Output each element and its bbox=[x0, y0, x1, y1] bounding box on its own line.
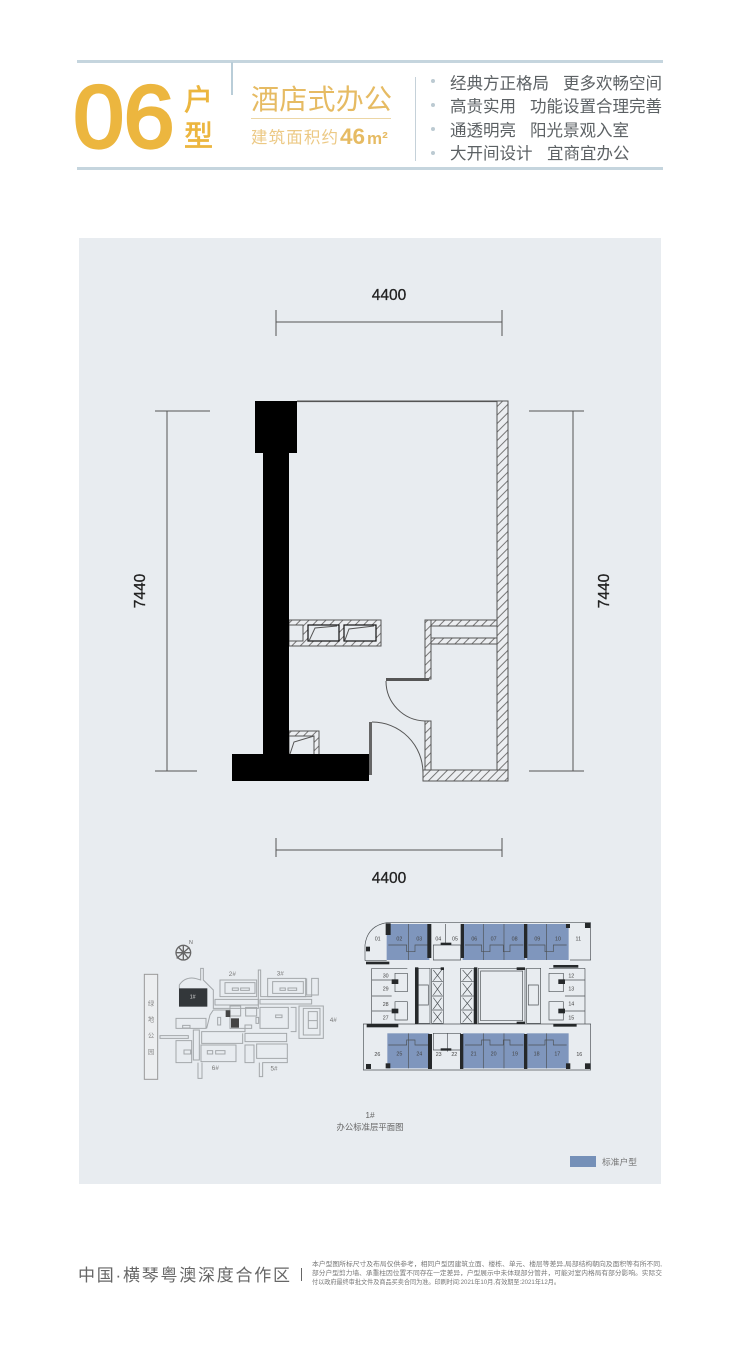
unit label: 户 bbox=[184, 84, 213, 117]
room numbers: 11 bbox=[576, 936, 581, 942]
room numbers: 27 bbox=[383, 1016, 389, 1022]
green park bbox=[144, 974, 158, 1079]
green park: 地 bbox=[148, 1014, 155, 1023]
room numbers: 22 bbox=[451, 1052, 457, 1058]
height left: 7440 bbox=[132, 573, 149, 608]
room numbers: 15 bbox=[568, 1016, 574, 1022]
room outlines bbox=[363, 923, 591, 1070]
location: 中国·横琴粤澳深度合作区 bbox=[78, 1266, 290, 1285]
room numbers: 14 bbox=[568, 1001, 574, 1007]
floor area: 46 bbox=[340, 124, 365, 149]
key plan caption bbox=[336, 1110, 404, 1132]
key plan caption: 办公标准层平面图 bbox=[336, 1122, 404, 1132]
room numbers: 16 bbox=[576, 1052, 582, 1058]
room numbers: 06 bbox=[471, 936, 477, 942]
room numbers: 20 bbox=[491, 1052, 497, 1058]
room numbers: 05 bbox=[452, 936, 458, 942]
black structural walls bbox=[232, 401, 369, 781]
feature list: 宜商宜办公 bbox=[547, 144, 630, 163]
feature list: 功能设置合理完善 bbox=[530, 97, 662, 116]
disclaimer: 部分户型剪力墙、承重柱因位置不同存在一定差异，户型展示中未体现部分管井，可能对室内格局有部分影响。实际交 bbox=[312, 1268, 663, 1277]
room numbers: 01 bbox=[375, 936, 381, 942]
room numbers: 10 bbox=[555, 936, 561, 942]
green park: 公 bbox=[148, 1032, 155, 1039]
shafts bbox=[289, 620, 381, 755]
header bbox=[74, 60, 663, 170]
building 1 bbox=[179, 988, 207, 1007]
room numbers: 18 bbox=[534, 1052, 540, 1058]
width top: 4400 bbox=[372, 287, 407, 304]
unit number: 06 bbox=[74, 67, 174, 166]
room numbers: 24 bbox=[416, 1052, 422, 1058]
hatched bottom wall bbox=[423, 770, 508, 781]
hatched right wall bbox=[497, 401, 508, 781]
room numbers: 19 bbox=[512, 1052, 518, 1058]
room numbers: 17 bbox=[554, 1052, 560, 1058]
feature list: 阳光景观入室 bbox=[530, 121, 629, 140]
green park: 园 bbox=[148, 1048, 154, 1056]
bathroom walls bbox=[425, 620, 497, 770]
disclaimer: 本户型图所标尺寸及布局仅供参考，相同户型因建筑立面、楼栋、单元、楼层等差异,局部结构朝向及面积等有所不同, bbox=[312, 1259, 662, 1268]
room numbers: 29 bbox=[383, 987, 389, 993]
panel: floor plan background bbox=[79, 238, 661, 1184]
compass bbox=[176, 940, 193, 960]
feature list: 大开间设计 bbox=[450, 144, 532, 163]
room numbers: 23 bbox=[436, 1052, 442, 1058]
building labels: 2# bbox=[229, 971, 236, 978]
room numbers: 04 bbox=[435, 936, 441, 942]
building labels bbox=[212, 970, 337, 1073]
feature list bbox=[431, 74, 662, 163]
site plan bbox=[144, 940, 337, 1079]
compass: N bbox=[189, 940, 193, 946]
unit label: 型 bbox=[184, 120, 213, 153]
feature list: 高贵实用 bbox=[450, 97, 516, 116]
unit type title: 酒店式办公 bbox=[251, 84, 392, 115]
room numbers: 12 bbox=[568, 974, 574, 980]
building labels: 6# bbox=[212, 1065, 219, 1072]
stairs bbox=[226, 1010, 239, 1028]
structural columns bbox=[366, 923, 590, 1069]
site roads and buildings bbox=[160, 968, 323, 1078]
room numbers: 08 bbox=[512, 936, 518, 942]
building labels: 5# bbox=[270, 1066, 278, 1073]
unit floor plan bbox=[232, 400, 508, 781]
standard floor key plan bbox=[363, 923, 591, 1070]
height right: 7440 bbox=[596, 573, 613, 608]
room numbers: 09 bbox=[534, 936, 540, 942]
room numbers: 28 bbox=[383, 1002, 389, 1008]
feature list: 更多欢畅空间 bbox=[563, 74, 662, 93]
room numbers: 25 bbox=[396, 1052, 402, 1058]
floor area bbox=[251, 124, 388, 149]
room numbers: 26 bbox=[374, 1052, 380, 1058]
building labels: 4# bbox=[330, 1017, 337, 1024]
room numbers bbox=[374, 936, 582, 1058]
room numbers: 07 bbox=[491, 936, 497, 942]
room numbers: 13 bbox=[568, 987, 574, 993]
width bottom: 4400 bbox=[372, 870, 407, 887]
disclaimer bbox=[312, 1259, 663, 1286]
dimensions bbox=[132, 287, 613, 887]
green park: 绿 bbox=[148, 998, 155, 1007]
key plan caption: 1# bbox=[365, 1110, 375, 1120]
building 1: 1# bbox=[190, 995, 196, 1001]
top wall line bbox=[297, 400, 508, 402]
feature list: 通透明亮 bbox=[450, 121, 516, 140]
feature list: 经典方正格局 bbox=[450, 74, 549, 93]
standard unit highlights bbox=[387, 924, 569, 1068]
room numbers: 21 bbox=[471, 1052, 477, 1058]
room numbers: 30 bbox=[383, 974, 389, 980]
footer bbox=[78, 1259, 663, 1286]
room numbers: 02 bbox=[396, 936, 402, 942]
legend: 标准户型 bbox=[602, 1156, 637, 1167]
unit label bbox=[184, 84, 213, 153]
legend bbox=[570, 1156, 637, 1167]
doors bbox=[369, 678, 429, 775]
disclaimer: 付以政府最终审批文件及商品买卖合同为准。印刷时间:2021年10月,有效期至:2021年12月。 bbox=[312, 1277, 560, 1286]
room numbers: 03 bbox=[416, 936, 422, 942]
building labels: 3# bbox=[277, 970, 284, 977]
floor area: m² bbox=[367, 129, 388, 148]
floor area: 建筑面积约 bbox=[251, 128, 338, 147]
